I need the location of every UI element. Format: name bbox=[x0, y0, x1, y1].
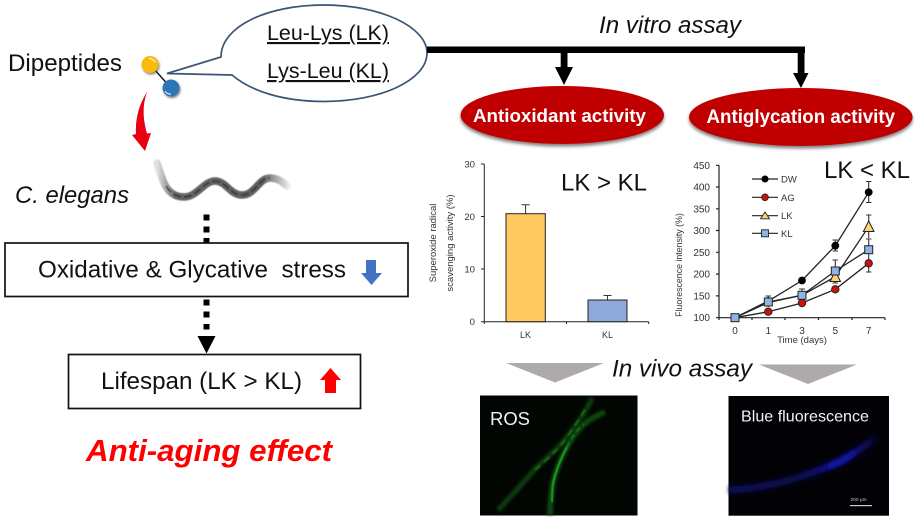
y axis label: scavenging activity (%) bbox=[445, 194, 456, 292]
y axis ticks: 400 bbox=[693, 182, 710, 194]
text: Lys-Leu: Lys-Leu (KL) bbox=[267, 59, 389, 83]
oval: antiglycation activity bbox=[689, 88, 913, 146]
axes bbox=[481, 164, 649, 324]
box: lifespan bbox=[68, 354, 360, 408]
series LK bbox=[830, 221, 874, 282]
y axis label bbox=[428, 194, 456, 292]
x axis ticks and title: 5 bbox=[833, 326, 839, 337]
label: Blue fluorescence: Blue fluorescence bbox=[741, 408, 869, 426]
axes bbox=[716, 165, 885, 320]
y axis ticks: 150 bbox=[693, 291, 710, 302]
bars: KL bbox=[602, 330, 613, 340]
legend: LK bbox=[781, 211, 793, 222]
scale bar: 200 μm bbox=[850, 497, 867, 503]
oval: antioxidant activity: Antioxidant activity bbox=[473, 105, 647, 126]
heading: In vivo assay: In vivo assay bbox=[612, 356, 754, 383]
x axis ticks and title bbox=[732, 326, 872, 346]
x axis ticks and title: 0 bbox=[732, 326, 738, 337]
icon: dipeptide molecule bbox=[142, 56, 180, 96]
legend: AG bbox=[781, 193, 795, 204]
y axis ticks bbox=[693, 161, 710, 324]
y axis ticks: 300 bbox=[693, 226, 710, 237]
y axis ticks bbox=[464, 160, 475, 328]
arrow: grey triangle left bbox=[506, 363, 604, 382]
y axis ticks: 450 bbox=[693, 161, 710, 172]
comparison: LK > KL: LK > KL bbox=[561, 170, 647, 197]
icon: worm bbox=[157, 163, 287, 197]
series AG bbox=[765, 260, 872, 315]
y axis ticks: 30 bbox=[464, 160, 475, 170]
heading: In vitro assay: In vitro assay bbox=[599, 12, 743, 39]
dotted connector: worm to stress box bbox=[204, 214, 210, 243]
legend: DW bbox=[781, 174, 797, 186]
box: oxidative and glycative stress bbox=[5, 243, 408, 296]
micrograph: blue fluorescence worm bbox=[728, 396, 889, 516]
label: C. elegans: C. elegans bbox=[15, 182, 129, 209]
text: Anti-aging effect: Anti-aging effect bbox=[85, 433, 334, 468]
text: lifespan label: Lifespan (LK > KL) bbox=[101, 368, 302, 395]
series KL bbox=[731, 246, 873, 322]
legend bbox=[752, 174, 797, 240]
micrograph: ROS green worms bbox=[480, 396, 638, 516]
oval: antiglycation activity: Antiglycation activity bbox=[706, 106, 895, 128]
text: stress label: Oxidative & Glycative stress bbox=[38, 256, 346, 284]
series DW bbox=[764, 188, 873, 305]
text: Leu-Lys: Leu-Lys (LK) bbox=[267, 21, 389, 45]
y axis ticks: 20 bbox=[464, 212, 475, 223]
error bars bbox=[766, 182, 871, 307]
icon: blue down arrow bbox=[361, 260, 382, 285]
heading: Dipeptides: Dipeptides bbox=[8, 50, 122, 77]
scale bar bbox=[850, 497, 872, 506]
icon: red up arrow bbox=[320, 368, 341, 393]
dotted arrow: stress to lifespan bbox=[198, 300, 216, 354]
bars bbox=[506, 205, 627, 340]
arrow: grey triangle right bbox=[759, 364, 857, 384]
y axis label: Superoxide radical bbox=[428, 204, 439, 282]
bar chart: superoxide radical scavenging bbox=[428, 160, 649, 340]
oval: antioxidant activity bbox=[461, 86, 664, 144]
y axis ticks: 200 bbox=[693, 270, 710, 281]
x axis ticks and title: 3 bbox=[799, 326, 805, 337]
x axis ticks and title: 7 bbox=[866, 326, 872, 337]
y axis label: Fluorescence intensity (%) bbox=[674, 213, 684, 317]
y axis ticks: 0 bbox=[470, 317, 475, 328]
x axis ticks and title: 1 bbox=[766, 326, 772, 337]
legend: KL bbox=[781, 229, 793, 240]
line chart: fluorescence intensity bbox=[674, 161, 885, 346]
arrow: red curved bbox=[132, 92, 151, 151]
speech bubble: dipeptide names bbox=[167, 5, 427, 102]
x axis ticks and title: Time (days) bbox=[777, 335, 827, 346]
y axis ticks: 250 bbox=[693, 248, 710, 259]
y axis ticks: 100 bbox=[693, 313, 710, 324]
label: ROS: ROS bbox=[490, 408, 530, 429]
y axis ticks: 350 bbox=[693, 204, 710, 215]
arrow: in vitro branch connector bbox=[427, 46, 808, 88]
series lines bbox=[735, 192, 869, 318]
bars: LK bbox=[520, 330, 531, 340]
comparison: LK < KL: LK < KL bbox=[824, 157, 910, 184]
y axis ticks: 10 bbox=[464, 264, 475, 276]
